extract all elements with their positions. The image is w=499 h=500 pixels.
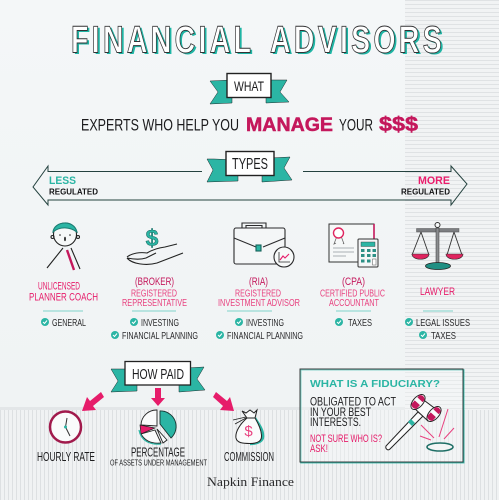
arrow: to commission bbox=[213, 392, 234, 411]
banner: types: TYPES bbox=[232, 156, 268, 173]
brand name: Napkin Finance bbox=[207, 475, 294, 489]
item: general: GENERAL bbox=[52, 318, 86, 329]
column: broker bbox=[111, 225, 198, 342]
icon: scales of justice bbox=[412, 222, 463, 270]
banner: types bbox=[207, 152, 292, 182]
icon: money bag: $ bbox=[244, 423, 253, 440]
heading: fiduciary: WHAT IS A FIDUCIARY? bbox=[310, 379, 440, 390]
title: ADVISORS bbox=[270, 20, 442, 62]
item: taxes: TAXES bbox=[348, 318, 372, 329]
icon: gavel bbox=[386, 392, 454, 451]
column: broker: REGISTERED bbox=[131, 288, 177, 300]
column: unlicensed planner coach: UNLICENSED bbox=[38, 280, 80, 292]
subtitle: MANAGE bbox=[246, 115, 333, 136]
banner: how paid: HOW PAID bbox=[132, 367, 184, 383]
column: cpa: ACCOUNTANT bbox=[329, 298, 379, 309]
arrow: more regulated bbox=[250, 166, 467, 205]
column: ria: REGISTERED bbox=[235, 288, 281, 300]
arrow: more regulated: REGULATED bbox=[401, 186, 450, 196]
label: percentage: PERCENTAGE bbox=[131, 446, 185, 460]
label: percentage bbox=[110, 446, 207, 468]
item: taxes: TAXES bbox=[431, 331, 456, 342]
column: lawyer: LAWYER bbox=[420, 286, 455, 298]
column: broker: (BROKER) bbox=[135, 276, 174, 288]
label: commission: COMMISSION bbox=[224, 450, 274, 464]
arrow: to hourly rate bbox=[82, 392, 104, 411]
subtitle: YOUR bbox=[339, 116, 373, 134]
column: lawyer bbox=[405, 222, 470, 342]
icon: certificate and calculator bbox=[329, 224, 378, 267]
banner: what bbox=[210, 74, 289, 104]
icon: stick figure coach bbox=[47, 223, 80, 270]
title: FINANCIAL bbox=[73, 21, 253, 63]
icon: hand with dollar: $ bbox=[146, 225, 159, 251]
arrow: less regulated: LESS bbox=[49, 175, 76, 187]
title: ADVISORS bbox=[272, 21, 444, 63]
banner: how paid bbox=[111, 362, 205, 392]
arrow: more regulated: MORE bbox=[418, 175, 450, 187]
text: not sure: ASK! bbox=[310, 443, 328, 455]
text: not sure bbox=[310, 433, 382, 455]
text: definition: OBLIGATED TO ACT bbox=[310, 396, 396, 408]
column: cpa bbox=[320, 224, 385, 329]
title: FINANCIAL bbox=[71, 20, 251, 62]
arrow: less regulated bbox=[33, 166, 250, 205]
item: legal issues: LEGAL ISSUES bbox=[416, 318, 470, 329]
icon: pie chart bbox=[139, 410, 176, 444]
subtitle: $$$ bbox=[379, 114, 418, 136]
column: ria: (RIA) bbox=[249, 276, 268, 288]
title bbox=[71, 20, 444, 63]
icon: money bag bbox=[233, 410, 263, 444]
regulation arrow band bbox=[33, 152, 467, 205]
text: definition: INTERESTS. bbox=[310, 417, 361, 429]
item: investing: INVESTING bbox=[246, 318, 284, 329]
icon: clock bbox=[50, 412, 81, 442]
column: broker: REPRESENTATIVE bbox=[122, 298, 187, 309]
panel: what is a fiduciary bbox=[300, 369, 464, 463]
text: not sure: NOT SURE WHO IS? bbox=[310, 433, 382, 445]
icon: briefcase bbox=[234, 223, 294, 267]
text: definition bbox=[310, 396, 396, 429]
item: financial planning: FINANCIAL PLANNING bbox=[227, 331, 303, 342]
subtitle: EXPERTS WHO HELP YOU bbox=[81, 116, 239, 134]
banner: what: WHAT bbox=[234, 78, 264, 94]
column: unlicensed planner coach bbox=[29, 223, 98, 329]
label: percentage: OF ASSETS UNDER MANAGEMENT bbox=[110, 458, 207, 468]
subtitle bbox=[81, 114, 418, 136]
text: definition: IN YOUR BEST bbox=[310, 407, 371, 419]
item: investing: INVESTING bbox=[141, 318, 179, 329]
arrow: to percentage bbox=[151, 388, 165, 406]
label: hourly rate: HOURLY RATE bbox=[37, 450, 95, 464]
column: unlicensed planner coach: PLANNER COACH bbox=[29, 292, 98, 304]
item: financial planning: FINANCIAL PLANNING bbox=[122, 331, 198, 342]
column: ria bbox=[216, 223, 303, 342]
arrow: less regulated: REGULATED bbox=[49, 186, 98, 196]
column: cpa: (CPA) bbox=[342, 276, 365, 288]
column: cpa: CERTIFIED PUBLIC bbox=[320, 288, 385, 300]
column: ria: INVESTMENT ADVISOR bbox=[218, 298, 300, 309]
